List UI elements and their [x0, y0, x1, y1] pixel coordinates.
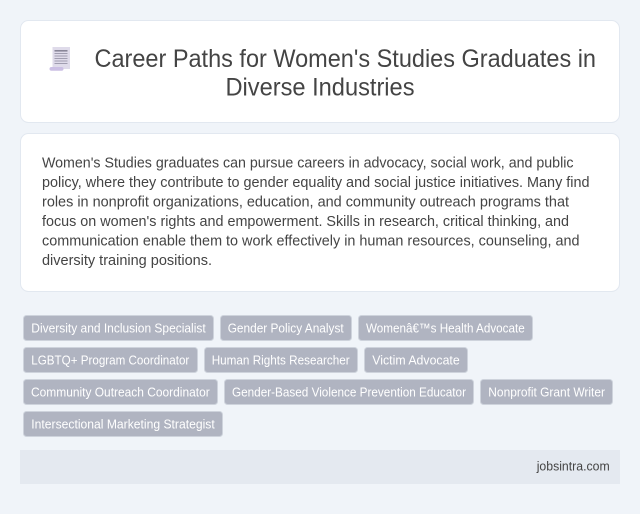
- tag: Community Outreach Coordinator: Community Outreach Coordinator: [31, 384, 210, 399]
- tag: Women's Health Advocate: Womenâ€™s Health Advocate: [366, 320, 525, 335]
- text block: description: Women's Studies graduates can pursue careers in advocacy, social work, and public: [42, 155, 574, 172]
- tag: Human Rights Researcher: [204, 348, 358, 372]
- tag: Intersectional Marketing Strategist: [24, 412, 222, 436]
- tag: Women's Health Advocate: [358, 316, 532, 340]
- tag: LGBTQ+ Program Coordinator: [24, 348, 198, 372]
- heading: title line 2: Diverse Industries: [226, 74, 414, 102]
- panel: career tags: [24, 316, 612, 436]
- tag: Nonprofit Grant Writer: Nonprofit Grant Writer: [488, 384, 606, 399]
- text block: description: roles in nonprofit organizations, education, and community outreach programs that: [42, 194, 570, 211]
- tag: Gender Policy Analyst: Gender Policy Analyst: [228, 320, 344, 335]
- tag: Gender-Based Violence Prevention Educator: [224, 380, 474, 404]
- tag: Intersectional Marketing Strategist: Intersectional Marketing Strategist: [31, 416, 215, 431]
- icon: document scroll: [50, 47, 70, 71]
- text block: description: [42, 155, 590, 269]
- tag: Human Rights Researcher: Human Rights Researcher: [212, 352, 350, 367]
- footer text: jobsintra.com: [536, 459, 610, 474]
- tag: Diversity and Inclusion Specialist: Diversity and Inclusion Specialist: [31, 320, 206, 335]
- panel: description card: [20, 134, 620, 292]
- panel: title card: [20, 20, 620, 122]
- tag: Gender Policy Analyst: [220, 316, 352, 340]
- tag: Community Outreach Coordinator: [24, 380, 218, 404]
- tag: Diversity and Inclusion Specialist: [24, 316, 214, 340]
- tag: Gender-Based Violence Prevention Educator: Gender-Based Violence Prevention Educator: [232, 384, 467, 399]
- text block: description: diversity training positions.: [42, 252, 212, 269]
- tag: Victim Advocate: Victim Advocate: [372, 352, 460, 367]
- footer bar: [20, 450, 620, 484]
- text block: description: communication enable them to work effectively in human resources, counseling, and: [42, 233, 580, 250]
- tag: Nonprofit Grant Writer: [480, 380, 612, 404]
- heading: title line 1: Career Paths for Women's Studies Graduates in: [94, 45, 596, 73]
- tag: LGBTQ+ Program Coordinator: LGBTQ+ Program Coordinator: [31, 352, 190, 367]
- text block: description: policy, where they contribute to gender equality and social justice initiatives. Many find: [42, 174, 590, 191]
- text block: description: focus on women's rights and empowerment. Skills in research, critical thinking, and: [42, 213, 569, 230]
- tag: Victim Advocate: [364, 348, 468, 372]
